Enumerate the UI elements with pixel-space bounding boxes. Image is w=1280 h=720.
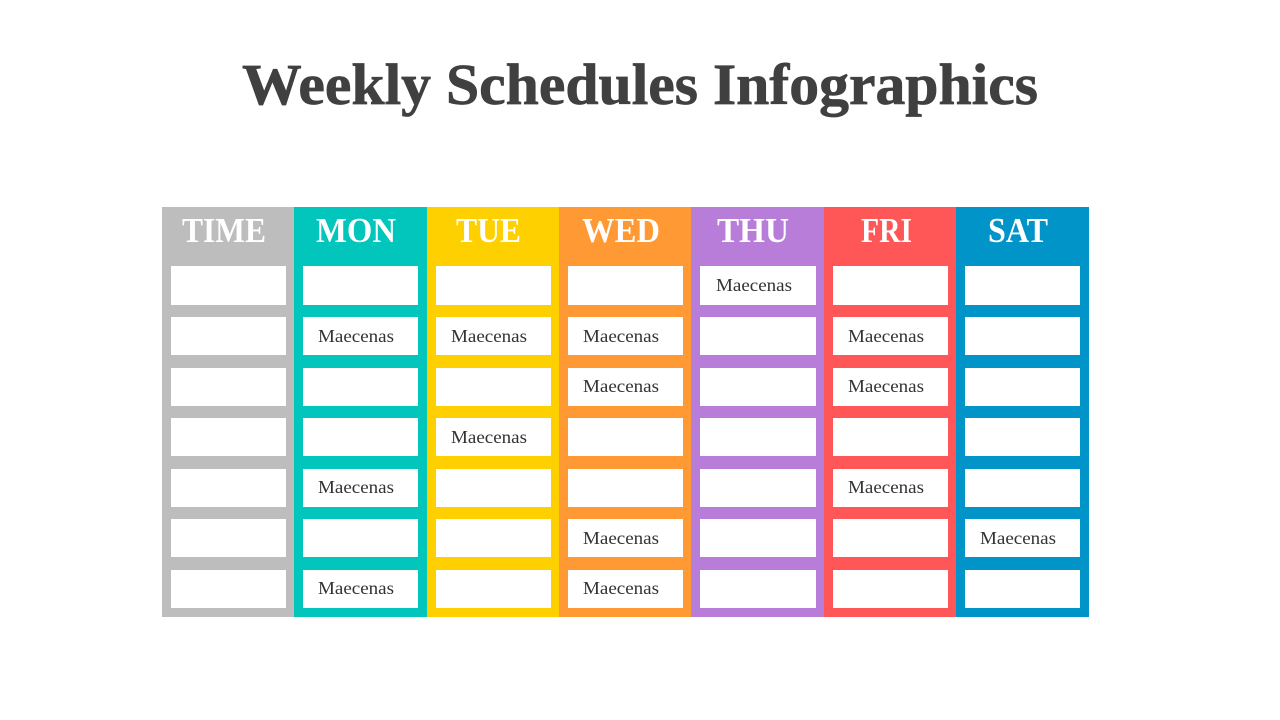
panel: TUE column <box>427 207 559 617</box>
panel: WED column: Maecenas <box>583 376 659 396</box>
panel: SAT column: Maecenas <box>980 528 1056 548</box>
panel: TUE column: Maecenas <box>451 427 527 447</box>
panel: MON column: Maecenas <box>318 477 394 497</box>
panel: MON column: Maecenas <box>318 326 394 346</box>
panel: WED column: Maecenas <box>583 528 659 548</box>
panel: FRI column: Maecenas <box>848 326 924 346</box>
panel: SAT column: SAT <box>988 211 1048 250</box>
panel: THU column <box>691 207 824 617</box>
panel: FRI column: Maecenas <box>848 376 924 396</box>
panel: TUE column: TUE <box>456 211 521 250</box>
panel: THU column: THU <box>717 211 789 250</box>
panel: MON column <box>294 207 427 617</box>
panel: TIME column: TIME <box>182 211 266 250</box>
panel: THU column: Maecenas <box>716 275 792 295</box>
panel: MON column: Maecenas <box>318 578 394 598</box>
panel: FRI column <box>824 207 956 617</box>
panel: TUE column: Maecenas <box>451 326 527 346</box>
panel: FRI column: FRI <box>861 211 912 250</box>
panel: WED column: Maecenas <box>583 326 659 346</box>
panel: WED column: WED <box>582 211 660 250</box>
panel: MON column: MON <box>316 211 396 250</box>
panel: WED column: Maecenas <box>583 578 659 598</box>
title: Weekly Schedules Infographics <box>242 52 1038 117</box>
schedule table <box>162 207 1089 617</box>
panel: TIME column <box>162 207 294 617</box>
panel: FRI column: Maecenas <box>848 477 924 497</box>
panel: WED column <box>559 207 691 617</box>
panel: SAT column <box>956 207 1089 617</box>
